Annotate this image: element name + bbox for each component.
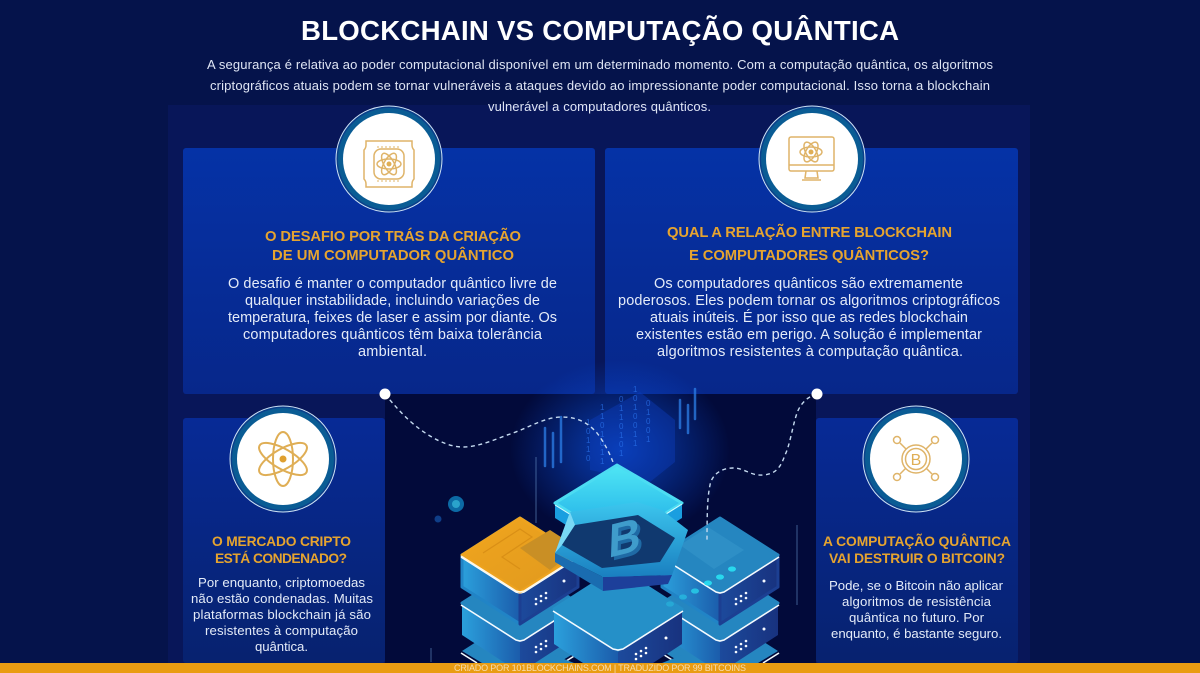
intro text: vulnerável a computadores quânticos. <box>488 99 711 114</box>
binary rain: 0 <box>586 427 591 436</box>
binary rain: 0 <box>646 399 651 408</box>
panel: relação <box>605 148 1018 394</box>
bitcoin symbol: B <box>608 507 642 568</box>
body: relação: existentes estão em perigo. A solução é implementar <box>636 327 982 343</box>
body: relação: Os computadores quânticos são extremamente <box>654 276 963 292</box>
heading: destruir o bitcoin: A COMPUTAÇÃO QUÂNTICA <box>823 532 1011 549</box>
dashed connector: left <box>385 394 613 462</box>
binary rain: 1 <box>633 385 638 394</box>
connector dot: left <box>380 388 390 400</box>
binary rain: 0 <box>586 454 591 463</box>
bitcoin symbol: B <box>611 510 645 571</box>
icon: chip atom <box>336 106 442 212</box>
panel: mercado cripto <box>183 418 385 663</box>
middle stack <box>553 465 683 663</box>
title: BLOCKCHAIN VS COMPUTAÇÃO QUÂNTICA <box>301 15 899 46</box>
intro text: A segurança é relativa ao poder computacional disponível em um determinado momento. Com a computação quântica, os algoritmos <box>207 57 994 72</box>
binary rain: 1 <box>600 403 605 412</box>
panel: destruir o bitcoin <box>816 418 1018 663</box>
body: relação: atuais inúteis. É por isso que as redes blockchain <box>650 309 968 326</box>
body: mercado cripto: Por enquanto, criptomoedas <box>198 575 365 590</box>
binary rain: 0 <box>646 426 651 435</box>
binary rain: 1 <box>633 430 638 439</box>
icon: atom <box>230 406 336 512</box>
heading: o desafio <box>265 227 521 264</box>
footer bar <box>0 663 1200 673</box>
binary rain: 0 <box>600 421 605 430</box>
heading: mercado cripto <box>212 534 351 566</box>
decorative node dots <box>434 496 464 522</box>
icon: bitcoin network <box>863 406 969 512</box>
intro text: criptográficos atuais podem se tornar vulneráveis a ataques devido ao impressionante poder computacional. Isso torna a blockchain <box>210 78 990 93</box>
body: destruir o bitcoin: Pode, se o Bitcoin não aplicar <box>829 578 1004 593</box>
binary rain: 1 <box>619 413 624 422</box>
binary rain: 1 <box>646 435 651 444</box>
binary rain: 1 <box>633 403 638 412</box>
binary rain: 1 <box>586 445 591 454</box>
binary rain: 1 <box>600 412 605 421</box>
binary rain: 0 <box>600 439 605 448</box>
binary rain: 0 <box>619 395 624 404</box>
binary rain: 1 <box>619 431 624 440</box>
binary rain: 1 <box>619 449 624 458</box>
binary rain: 1 <box>586 436 591 445</box>
heading: destruir o bitcoin <box>823 532 1011 566</box>
body: destruir o bitcoin: enquanto, é bastante seguro. <box>831 626 1002 641</box>
body: relação <box>618 276 1000 360</box>
body: o desafio: temperatura, feixes de laser e assim por diante. Os <box>228 310 557 326</box>
binary rain: 1 <box>619 404 624 413</box>
heading: mercado cripto: O MERCADO CRIPTO <box>212 534 351 549</box>
binary rain: 1 <box>646 408 651 417</box>
central illustration: blockchain servers <box>380 360 822 663</box>
binary rain: 0 <box>633 421 638 430</box>
binary rain: 1 <box>586 418 591 427</box>
heading: o desafio: DE UM COMPUTADOR QUÂNTICO <box>272 246 514 264</box>
binary rain: 1 <box>633 439 638 448</box>
body: mercado cripto: quântica. <box>255 639 308 654</box>
binary rain: 0 <box>619 440 624 449</box>
right stack <box>661 518 779 663</box>
bitcoin hexagon <box>555 502 688 591</box>
binary rain: 0 <box>619 422 624 431</box>
intro text <box>207 57 994 114</box>
body: mercado cripto: resistentes à computação <box>205 623 358 638</box>
body: mercado cripto: plataformas blockchain já são <box>193 607 371 622</box>
cyan indicator lights <box>666 566 736 607</box>
body: destruir o bitcoin: quântica no futuro. Por <box>849 610 985 625</box>
heading: relação <box>667 223 952 264</box>
icon: monitor atom <box>759 106 865 212</box>
body: relação: algoritmos resistentes à computação quântica. <box>657 344 963 360</box>
body: destruir o bitcoin: algoritmos de resistência <box>842 594 992 609</box>
binary rain <box>586 385 651 466</box>
binary rain: 0 <box>633 412 638 421</box>
body: mercado cripto: não estão condenadas. Muitas <box>191 591 373 606</box>
heading: o desafio: O DESAFIO POR TRÁS DA CRIAÇÃO <box>265 227 521 245</box>
connector dot: right <box>812 388 822 400</box>
left stack <box>461 518 579 663</box>
heading: relação: QUAL A RELAÇÃO ENTRE BLOCKCHAIN <box>667 223 952 241</box>
binary rain: 0 <box>646 417 651 426</box>
binary rain: 1 <box>600 457 605 466</box>
panel: o desafio <box>183 148 595 394</box>
footer bar: CRIADO POR 101BLOCKCHAINS.COM | TRADUZIDO POR 99 BITCOINS <box>454 663 746 673</box>
body: mercado cripto <box>191 575 373 654</box>
body: o desafio: ambiental. <box>358 344 427 360</box>
heading: relação: E COMPUTADORES QUÂNTICOS? <box>689 246 929 264</box>
body: relação: poderosos. Eles podem tornar os algoritmos criptográficos <box>618 293 1000 309</box>
body: o desafio: O desafio é manter o computador quântico livre de <box>228 276 557 292</box>
body: o desafio <box>228 276 557 360</box>
body: o desafio: computadores quânticos têm baixa tolerância <box>243 327 543 343</box>
body: destruir o bitcoin <box>829 578 1004 641</box>
binary rain: 0 <box>633 394 638 403</box>
dashed connector: right <box>707 394 817 540</box>
binary rain: 1 <box>600 430 605 439</box>
icon: bitcoin network: B <box>911 452 921 469</box>
heading: destruir o bitcoin: VAI DESTRUIR O BITCOIN? <box>829 551 1005 566</box>
heading: mercado cripto: ESTÁ CONDENADO? <box>215 550 347 566</box>
body: o desafio: qualquer instabilidade, incluindo variações de <box>245 293 540 309</box>
binary rain: 1 <box>600 448 605 457</box>
